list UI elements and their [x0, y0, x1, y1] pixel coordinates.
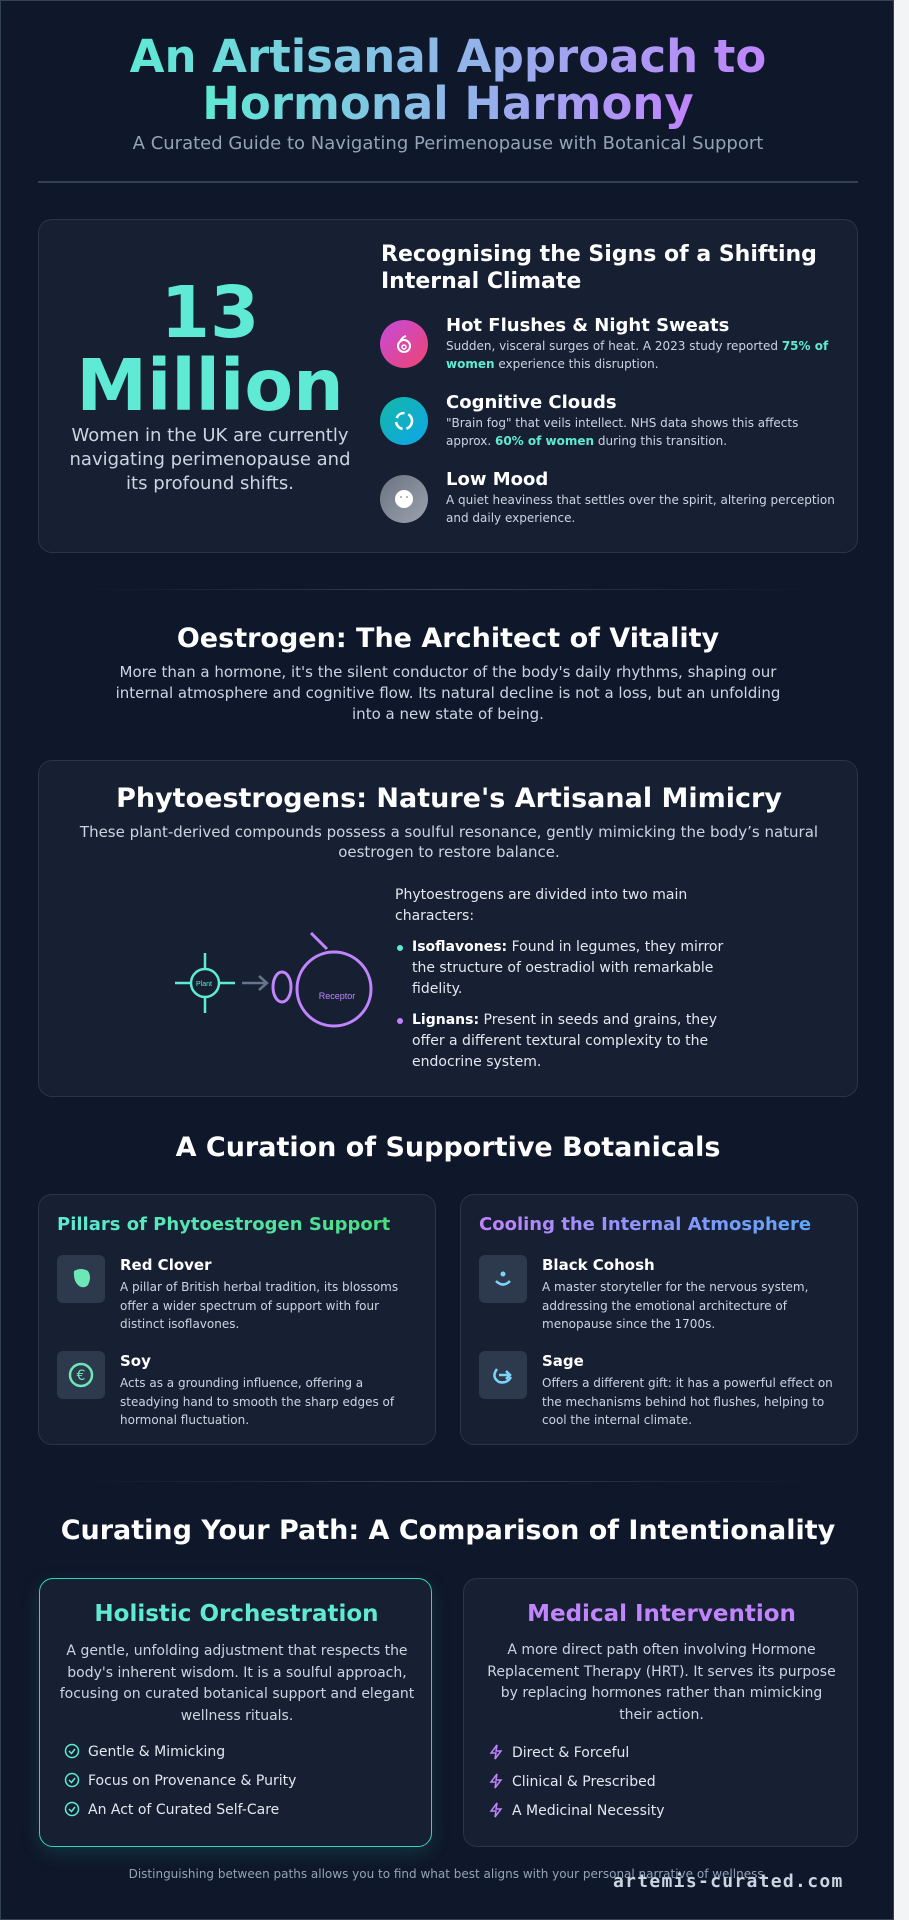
footer note: Distinguishing between paths allows you to find what best aligns with your personal narrative of wellness.	[129, 1867, 767, 1881]
list: A Medicinal Necessity	[512, 1803, 665, 1819]
title	[130, 30, 766, 130]
text: "Brain fog" that veils intellect. NHS data shows this affects approx. 60% of women during this transition.	[446, 416, 798, 448]
panel: holistic	[39, 1578, 432, 1847]
item: sage: Sage	[542, 1352, 584, 1370]
panel: statistic and symptoms	[38, 219, 858, 553]
diagram: plant to receptor: Receptor	[319, 991, 355, 1001]
intro: These plant-derived compounds possess a soulful resonance, gently mimicking the body’s natural oestrogen to restore balance.	[80, 823, 818, 861]
icon: brain fog	[380, 397, 428, 445]
icon: soy	[57, 1351, 105, 1399]
item: black cohosh: Black Cohosh	[542, 1256, 655, 1274]
diagram: plant to receptor	[175, 932, 372, 1028]
title: Pillars of Phytoestrogen Support	[57, 1214, 390, 1235]
heading: Phytoestrogens: Nature's Artisanal Mimicry	[116, 783, 782, 814]
icon: black cohosh	[479, 1255, 527, 1303]
icon: sage	[479, 1351, 527, 1399]
heading: botanicals: A Curation of Supportive Botanicals	[176, 1132, 720, 1163]
title: Cooling the Internal Atmosphere	[479, 1214, 811, 1235]
icon: mood	[380, 475, 428, 523]
list	[64, 1744, 296, 1818]
text: two characters: Phytoestrogens are divided into two main characters:	[395, 887, 687, 924]
text: Sudden, visceral surges of heat. A 2023 study reported 75% of women experience this disruption.	[446, 339, 828, 371]
heading: comparison: Curating Your Path: A Comparison of Intentionality	[61, 1515, 835, 1546]
panel: cooling: Offers a different gift: it has a powerful effect on the mechanisms behind hot flushes, helping to cool the internal climate.	[542, 1376, 833, 1427]
diagram: plant to receptor: Plant	[196, 981, 212, 988]
big stat	[76, 271, 344, 427]
subtitle: A Curated Guide to Navigating Perimenopause with Botanical Support	[133, 133, 763, 154]
stat caption: Women in the UK are currently navigating perimenopause and its profound shifts.	[70, 425, 350, 494]
list: Clinical & Prescribed	[512, 1774, 656, 1790]
symptom: cognitive clouds: Cognitive Clouds	[446, 392, 617, 413]
symptoms heading: Recognising the Signs of a Shifting Internal Climate	[381, 242, 817, 294]
title: Medical Intervention	[527, 1601, 796, 1627]
panel: pillars: Acts as a grounding influence, offering a steadying hand to smooth the sharp edges of hormonal fluctuation.	[120, 1376, 394, 1427]
watermark: artemis-curated.com	[613, 1871, 844, 1892]
panel: pillars	[38, 1194, 436, 1445]
heading: oestrogen: Oestrogen: The Architect of Vitality	[177, 623, 719, 654]
panel: phytoestrogens	[38, 760, 858, 1097]
symptom: low mood: Low Mood	[446, 469, 548, 490]
icon: flame	[380, 320, 428, 368]
list: Focus on Provenance & Purity	[88, 1773, 296, 1789]
text: two characters: Lignans: Present in seeds and grains, they offer a different textural complexity to the endocrine system.	[412, 1012, 717, 1070]
panel: medical	[463, 1578, 858, 1847]
list: Direct & Forceful	[512, 1745, 629, 1761]
text: two characters: Isoflavones: Found in legumes, they mirror the structure of oestradiol with remarkable fidelity.	[412, 939, 723, 997]
title: An Artisanal Approach to	[130, 30, 766, 83]
big stat: 13	[161, 271, 259, 354]
big stat: Million	[76, 344, 344, 427]
description: A gentle, unfolding adjustment that respects the body's inherent wisdom. It is a soulful approach, focusing on curated botanical support and elegant wellness rituals.	[60, 1643, 414, 1724]
panel: pillars: A pillar of British herbal tradition, its blossoms offer a wider spectrum of support with four distinct isoflavones.	[120, 1280, 398, 1331]
oestrogen text: More than a hormone, it's the silent conductor of the body's daily rhythms, shaping our internal atmosphere and cognitive flow. Its natural decline is not a loss, but an unfolding into a new state of being.	[116, 663, 780, 723]
symptom: hot flushes: Hot Flushes & Night Sweats	[446, 315, 729, 336]
description: A more direct path often involving Hormone Replacement Therapy (HRT). It serves its purpose by replacing hormones rather than mimicking their action.	[487, 1642, 836, 1722]
icon: clover	[57, 1255, 105, 1303]
list: An Act of Curated Self-Care	[88, 1802, 279, 1818]
text: A quiet heaviness that settles over the spirit, altering perception and daily experience.	[446, 493, 835, 525]
item: soy: Soy	[120, 1352, 151, 1370]
title: Hormonal Harmony	[202, 77, 694, 130]
text: two characters	[395, 887, 724, 1070]
icon: soy: €	[77, 1368, 85, 1384]
panel: cooling	[460, 1194, 858, 1445]
panel: cooling: A master storyteller for the nervous system, addressing the emotional architecture of menopause since the 1700s.	[542, 1280, 808, 1331]
list: Gentle & Mimicking	[88, 1744, 225, 1760]
list	[490, 1744, 665, 1819]
item: red clover: Red Clover	[120, 1256, 212, 1274]
title: Holistic Orchestration	[94, 1601, 379, 1627]
